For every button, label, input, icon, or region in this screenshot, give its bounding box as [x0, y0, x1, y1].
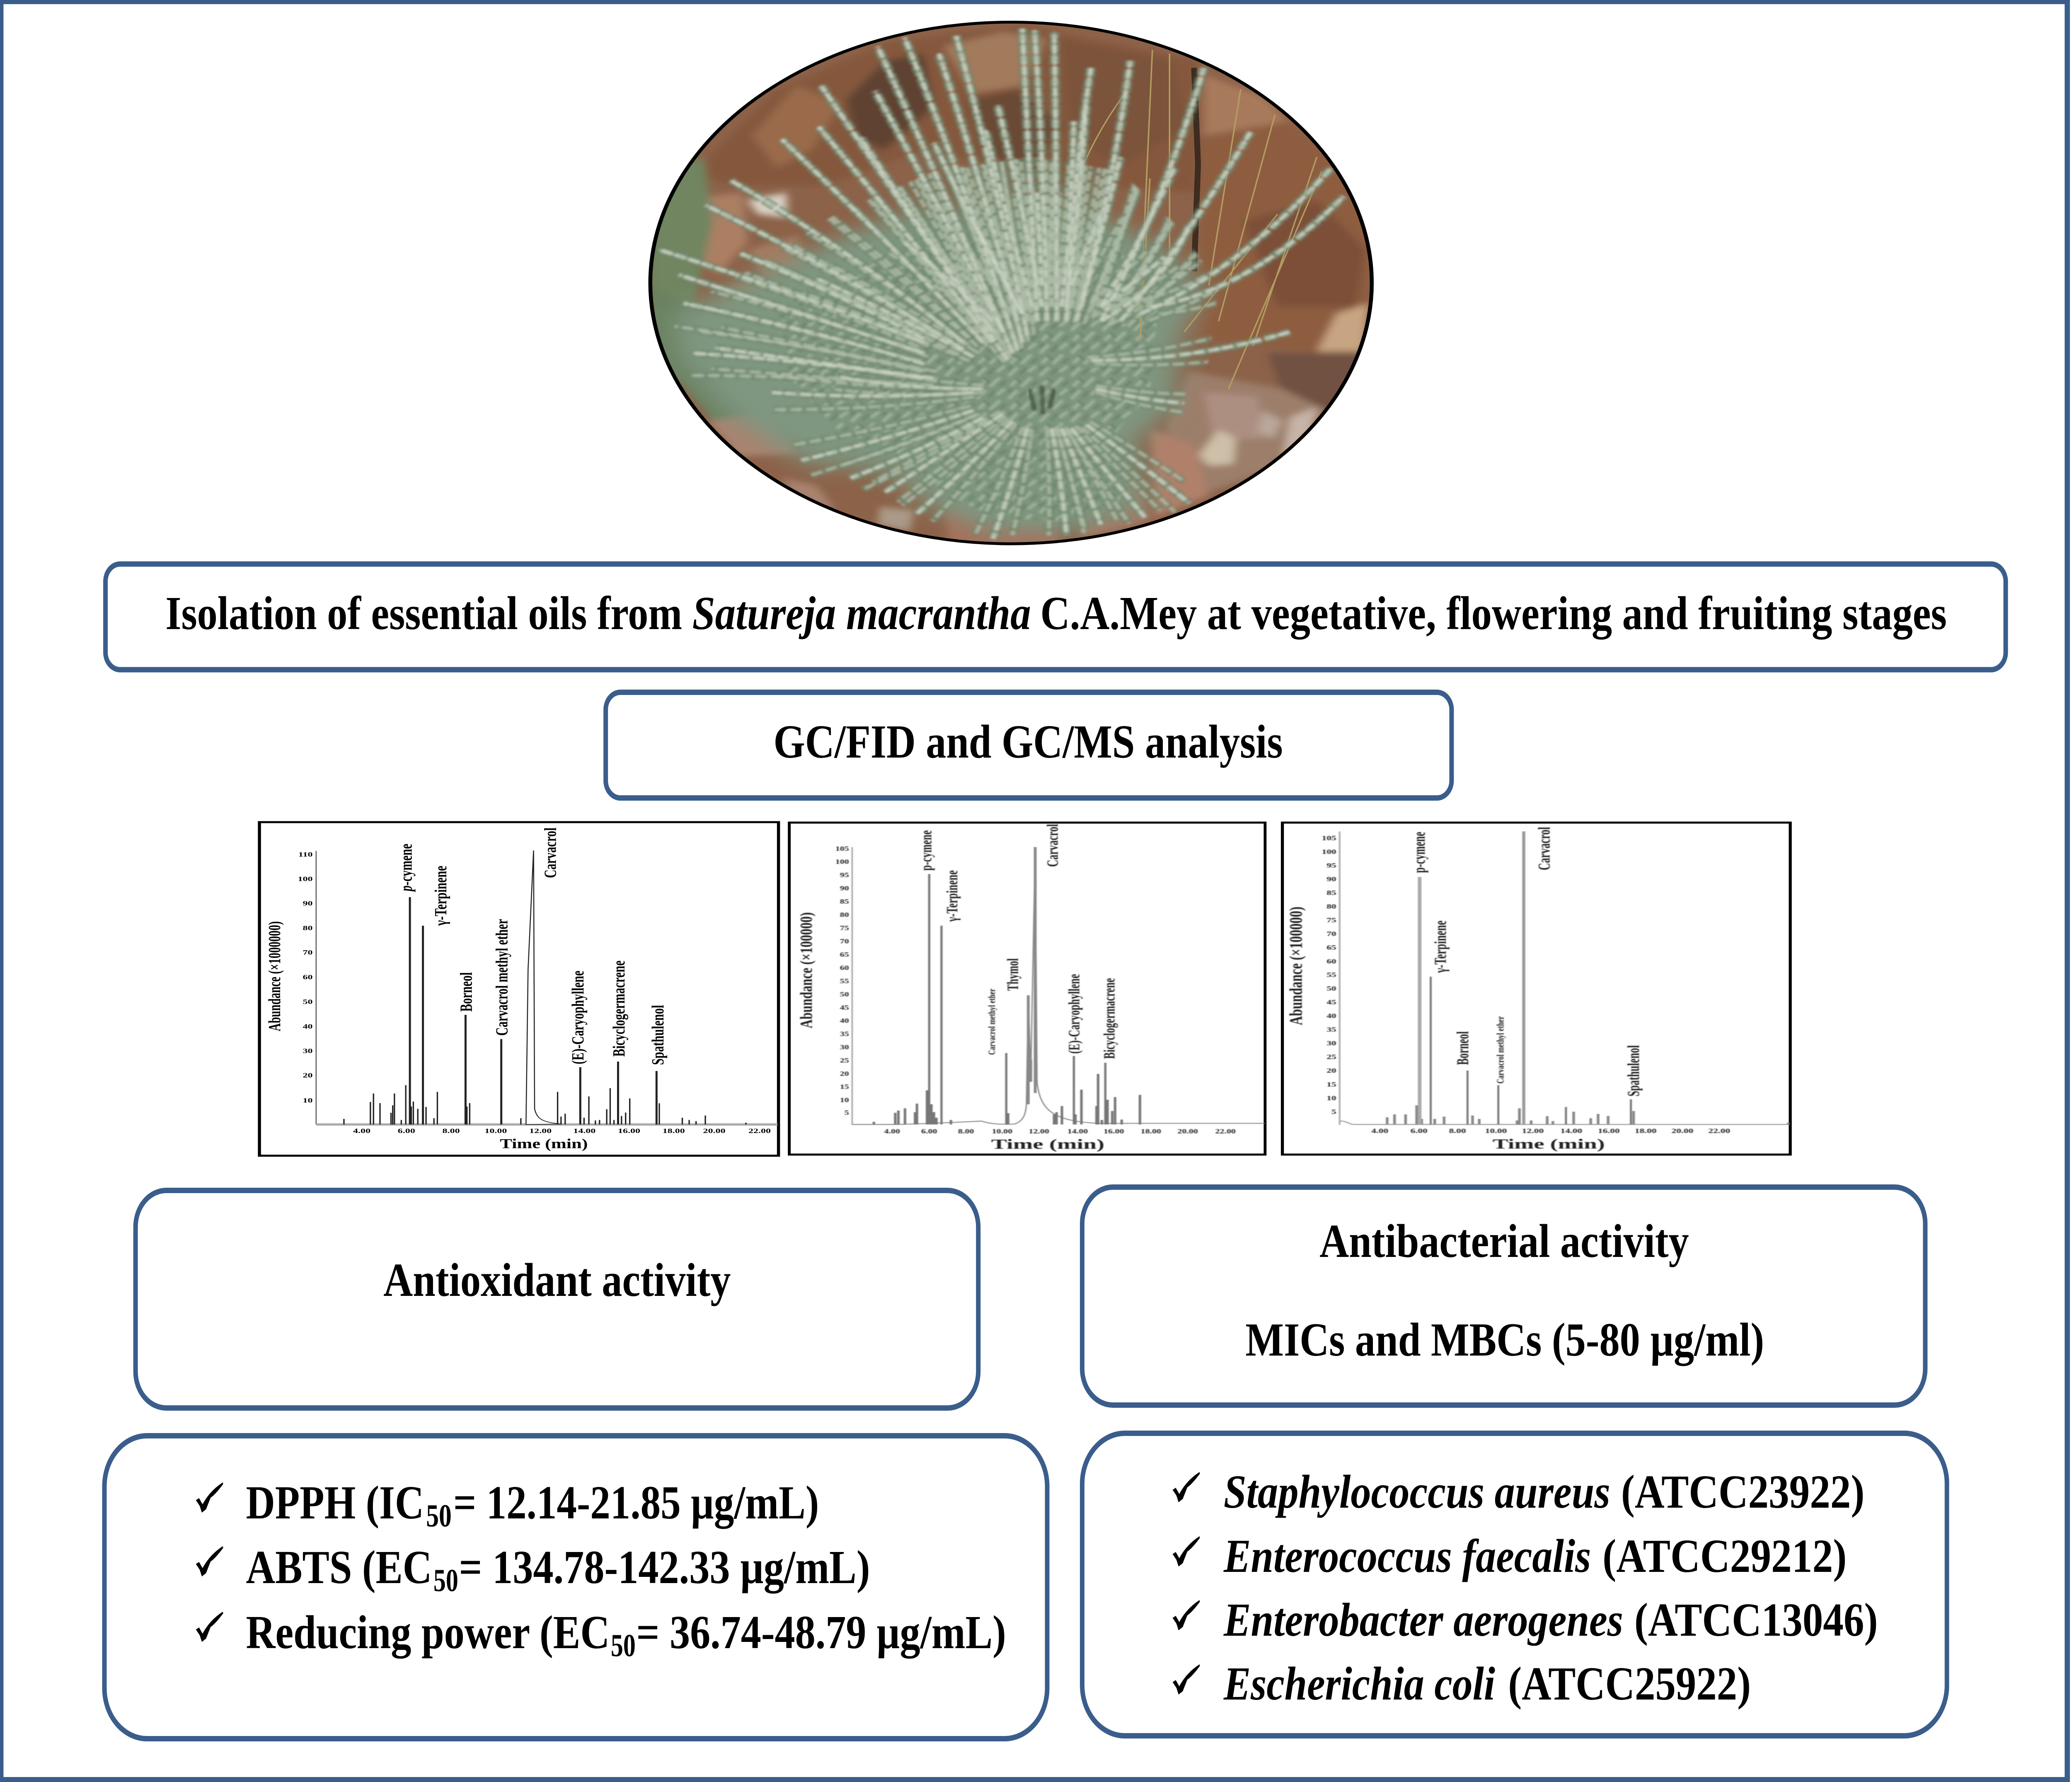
- chart 3 x-axis ticks: [1371, 1128, 1730, 1135]
- chart 3 x-axis ticks: 8.00: [1449, 1128, 1466, 1135]
- chart 1 compound labels: Spathulenol: [648, 1005, 667, 1065]
- chart 2 x-axis ticks: 6.00: [921, 1128, 937, 1135]
- chart 1 peaks: [344, 850, 746, 1124]
- list item: reducing power: 50: [611, 1628, 636, 1663]
- chart 1 x-axis ticks: 14.00: [573, 1128, 595, 1135]
- chart 2 y-axis ticks: 85: [840, 898, 849, 906]
- chart 2 y-axis ticks: 20: [840, 1070, 849, 1077]
- chart 3 y-axis ticks: 100: [1322, 848, 1336, 855]
- chart 2 y-axis ticks: 10: [840, 1097, 849, 1104]
- list item: DPPH: = 12.14-21.85 µg/mL): [453, 1476, 819, 1529]
- chart 3 y-axis ticks: 50: [1326, 985, 1336, 992]
- chart 2 y-axis ticks: 25: [840, 1057, 849, 1064]
- chart 2 y-axis ticks: 90: [840, 885, 849, 892]
- analysis box: GC/FID and GC/MS: [606, 692, 1452, 798]
- chart 2 y-axis ticks: 55: [840, 978, 849, 985]
- chart 2 y-axis ticks: 35: [840, 1031, 849, 1038]
- chart 3 y-axis ticks: 85: [1326, 889, 1336, 896]
- chart 1 y-axis ticks: [298, 851, 313, 1104]
- chart 2 y-axis ticks: 75: [840, 925, 849, 932]
- chart 3 y-axis ticks: 105: [1322, 835, 1336, 842]
- list item: Staphylococcus aureus: [1173, 1465, 1864, 1518]
- chart 2 y-axis ticks: 40: [840, 1017, 849, 1024]
- list item: DPPH: DPPH (IC: [246, 1476, 424, 1529]
- chart 3 axis titles: [1286, 907, 1605, 1152]
- chart 2 y-axis ticks: 60: [840, 964, 849, 972]
- title text: Isolation of essential oils from: [165, 587, 682, 640]
- chart 2 y-axis ticks: 50: [840, 991, 849, 998]
- chart 3 y-axis ticks: 25: [1326, 1053, 1336, 1061]
- chart 2 x-axis ticks: 12.00: [1029, 1128, 1049, 1135]
- list item: ABTS: = 134.78-142.33 µg/mL): [459, 1541, 870, 1594]
- list item: DPPH: [196, 1476, 819, 1533]
- chart 2 compound labels: Thymol: [1005, 958, 1022, 991]
- chart 1 compound labels: Borneol: [457, 972, 476, 1012]
- chart 3 y-axis ticks: 20: [1326, 1067, 1336, 1075]
- chart 3 y-axis ticks: 65: [1326, 944, 1336, 952]
- chromatogram 3: fruiting stage: [1283, 823, 1790, 1155]
- chart 3 y-axis ticks: 75: [1326, 917, 1336, 924]
- chart 3 compound labels: Spathulenol: [1624, 1045, 1643, 1097]
- chart 3 x-axis ticks: 14.00: [1560, 1128, 1582, 1135]
- chart 2 peaks: [874, 847, 1140, 1124]
- chart 2 compound labels: Carvacrol: [1044, 824, 1062, 867]
- chart 1 compound labels: Carvacrol: [541, 828, 560, 878]
- chart 2 y-axis ticks: 65: [840, 951, 849, 959]
- chart 2 y-axis ticks: 100: [835, 859, 849, 866]
- chromatogram 1: vegetative stage: [259, 822, 779, 1156]
- chart 1 compound labels: Carvacrol methyl ether: [492, 919, 511, 1036]
- chart 1 axis titles: Abundance (×1000000): [265, 921, 284, 1031]
- chart 2 y-axis ticks: 5: [845, 1109, 849, 1116]
- chart 2 y-axis ticks: 45: [840, 1004, 849, 1012]
- chart 1 x-axis ticks: [353, 1128, 771, 1135]
- chart 1 x-axis ticks: 10.00: [484, 1128, 507, 1135]
- chart 3 y-axis ticks: 55: [1326, 971, 1336, 978]
- chart 1 y-axis ticks: 60: [303, 974, 313, 981]
- list item: reducing power: [196, 1606, 1006, 1663]
- chart 2 x-axis ticks: 8.00: [958, 1128, 974, 1135]
- chart 3 peaks: [1387, 831, 1788, 1124]
- antioxidant heading text: Antioxidant activity: [383, 1254, 731, 1307]
- chart 3 x-axis ticks: 22.00: [1709, 1128, 1730, 1135]
- chart 2 compound labels: Bicyclogermacrene: [1101, 978, 1118, 1059]
- chart 3 x-axis ticks: 10.00: [1485, 1128, 1507, 1135]
- chart 3 y-axis ticks: 15: [1326, 1081, 1336, 1088]
- chart 1 compound labels: (E)-Caryophyllene: [568, 971, 587, 1064]
- chart 1 x-axis ticks: 12.00: [529, 1128, 552, 1135]
- chart 1 compound labels: Bicyclogermacrene: [610, 961, 629, 1057]
- panel: antibacterial activity heading: [1082, 1187, 1925, 1405]
- analysis text: GC/FID and GC/MS analysis: [773, 715, 1283, 768]
- chart 3 x-axis ticks: 6.00: [1411, 1128, 1428, 1135]
- list item: Enterobacter aerogenes: Enterobacter aerogenes: [1223, 1593, 1623, 1646]
- chart 2 axis titles: Abundance (×100000): [796, 912, 816, 1028]
- chart 2 x-axis ticks: [884, 1128, 1236, 1135]
- chart 2 axis titles: [796, 912, 1104, 1152]
- chart 3 y-axis ticks: 95: [1326, 862, 1336, 869]
- chart 1 y-axis ticks: 100: [298, 876, 313, 883]
- chart 3 y-axis ticks: 60: [1326, 958, 1336, 965]
- chart 3 y-axis ticks: 45: [1326, 999, 1336, 1006]
- title box: isolation of essential oils: [106, 564, 2006, 670]
- chart 1 x-axis ticks: 18.00: [663, 1128, 685, 1135]
- panel: antibacterial strains list: [1082, 1433, 1947, 1736]
- chart 1 compound labels: [397, 828, 667, 1065]
- chart 3 x-axis ticks: 4.00: [1371, 1128, 1388, 1135]
- chart 1 y-axis ticks: 50: [303, 998, 313, 1005]
- chart 1 y-axis ticks: 30: [303, 1048, 313, 1055]
- chart 2 x-axis ticks: 14.00: [1067, 1128, 1088, 1135]
- list item: Escherichia coli: (ATCC25922): [1508, 1657, 1751, 1710]
- list item: ABTS: ABTS (EC: [246, 1541, 432, 1594]
- chart 2 y-axis ticks: 30: [840, 1044, 849, 1051]
- chart 1 y-axis ticks: 110: [298, 851, 313, 858]
- chart 2 y-axis ticks: 95: [840, 872, 849, 879]
- chart 3 y-axis ticks: [1322, 835, 1336, 1116]
- chart 2 x-axis ticks: 4.00: [884, 1128, 900, 1135]
- chart 3 axis titles: Time (min): [1493, 1136, 1605, 1152]
- chart 3 x-axis ticks: 18.00: [1635, 1128, 1656, 1135]
- chart 1 x-axis ticks: 8.00: [443, 1128, 460, 1135]
- list item: Enterococcus faecalis: Enterococcus faecalis: [1223, 1530, 1591, 1583]
- list item: Staphylococcus aureus: (ATCC23922): [1621, 1465, 1864, 1518]
- chart 3 y-axis ticks: 30: [1326, 1040, 1336, 1047]
- chart 2 y-axis ticks: 70: [840, 938, 849, 945]
- chart 2 x-axis ticks: 10.00: [992, 1128, 1012, 1135]
- chart 1 x-axis ticks: 22.00: [748, 1128, 771, 1135]
- MIC and MBC text: MICs and MBCs (5-80 µg/ml): [1245, 1313, 1764, 1366]
- list item: reducing power: = 36.74-48.79 µg/mL): [637, 1606, 1006, 1659]
- chart 1 y-axis ticks: 70: [303, 949, 313, 956]
- chart 2 y-axis ticks: 105: [835, 845, 849, 852]
- chart 1 x-axis ticks: 6.00: [398, 1128, 415, 1135]
- chart 3 compound labels: Carvacrol: [1535, 827, 1554, 870]
- chart 2 y-axis ticks: 15: [840, 1084, 849, 1091]
- list item: DPPH: 50: [426, 1499, 452, 1533]
- title text: C.A.Mey at vegetative, flowering and fruiting stages: [1041, 587, 1947, 640]
- chart 2 compound labels: p-cymene: [918, 830, 935, 871]
- chart 3 y-axis ticks: 10: [1326, 1094, 1336, 1102]
- chart 1 compound labels: γ-Terpinene: [431, 866, 450, 926]
- antibacterial heading text: Antibacterial activity: [1319, 1215, 1689, 1268]
- chart 1 x-axis ticks: 20.00: [703, 1128, 726, 1135]
- chart 3 y-axis ticks: 70: [1326, 930, 1336, 938]
- chart 3 axis titles: Abundance (×100000): [1286, 907, 1306, 1025]
- chart 3 y-axis ticks: 5: [1331, 1109, 1336, 1116]
- chart 1 y-axis ticks: 10: [303, 1097, 313, 1104]
- chart 1 y-axis ticks: 90: [303, 900, 313, 907]
- chart 1 x-axis ticks: 16.00: [618, 1128, 640, 1135]
- list item: reducing power: Reducing power (EC: [246, 1606, 610, 1659]
- list item: Escherichia coli: [1173, 1657, 1751, 1710]
- chart 3 compound labels: Borneol: [1454, 1031, 1472, 1065]
- list item: Staphylococcus aureus: Staphylococcus aureus: [1224, 1465, 1610, 1518]
- chart 2 x-axis ticks: 18.00: [1141, 1128, 1161, 1135]
- chromatogram 2: flowering stage: [789, 823, 1265, 1155]
- list item: Enterococcus faecalis: [1173, 1530, 1847, 1583]
- chart 1 y-axis ticks: 80: [303, 925, 313, 932]
- chart 3 compound labels: p-cymene: [1410, 832, 1428, 873]
- chart 2 compound labels: [918, 824, 1118, 1059]
- chart 3 compound labels: γ-Terpinene: [1431, 920, 1450, 973]
- list item: Enterobacter aerogenes: (ATCC13046): [1634, 1593, 1878, 1646]
- chart 1 compound labels: p-cymene: [397, 844, 416, 892]
- title text: [165, 587, 1947, 640]
- chart 1 y-axis ticks: 20: [303, 1072, 313, 1079]
- chart 3 compound labels: [1410, 827, 1643, 1097]
- title text: Satureja macrantha: [692, 587, 1031, 640]
- chart 1 axis titles: Time (min): [500, 1136, 588, 1151]
- chart 3 y-axis ticks: 40: [1326, 1012, 1336, 1019]
- chart 2 y-axis ticks: 80: [840, 911, 849, 919]
- panel: antioxidant activity heading: [136, 1190, 978, 1408]
- chart 3 y-axis ticks: 35: [1326, 1026, 1336, 1033]
- chart 2 x-axis ticks: 20.00: [1177, 1128, 1198, 1135]
- chart 2 x-axis ticks: 22.00: [1215, 1128, 1236, 1135]
- chart 3 y-axis ticks: 90: [1326, 876, 1336, 883]
- plant photograph: Satureja macrantha in oval frame: [648, 21, 1374, 545]
- list item: Enterococcus faecalis: (ATCC29212): [1602, 1530, 1847, 1583]
- chart 2 compound labels: γ-Terpinene: [944, 870, 961, 922]
- list item: Enterobacter aerogenes: [1173, 1593, 1878, 1646]
- chart 3 y-axis ticks: 80: [1326, 903, 1336, 910]
- chart 3 compound labels: Carvacrol methyl ether: [1496, 1016, 1506, 1084]
- list item: ABTS: [196, 1541, 870, 1598]
- chart 1 y-axis ticks: 40: [303, 1023, 313, 1030]
- list item: ABTS: 50: [433, 1563, 458, 1598]
- chart 1 x-axis ticks: 4.00: [353, 1128, 370, 1135]
- panel: antioxidant results list: [104, 1436, 1047, 1739]
- chart 2 x-axis ticks: 16.00: [1104, 1128, 1124, 1135]
- chart 2 y-axis ticks: [835, 845, 849, 1116]
- chart 2 compound labels: (E)-Caryophyllene: [1066, 974, 1083, 1054]
- list item: Escherichia coli: Escherichia coli: [1223, 1657, 1495, 1710]
- chart 2 axis titles: Time (min): [991, 1136, 1104, 1152]
- chart 3 x-axis ticks: 20.00: [1672, 1128, 1693, 1135]
- chart 3 x-axis ticks: 16.00: [1598, 1128, 1620, 1135]
- chart 2 compound labels: Carvacrol methyl ether: [987, 988, 997, 1055]
- chart 1 axis titles: [265, 921, 588, 1151]
- chart 3 x-axis ticks: 12.00: [1522, 1128, 1544, 1135]
